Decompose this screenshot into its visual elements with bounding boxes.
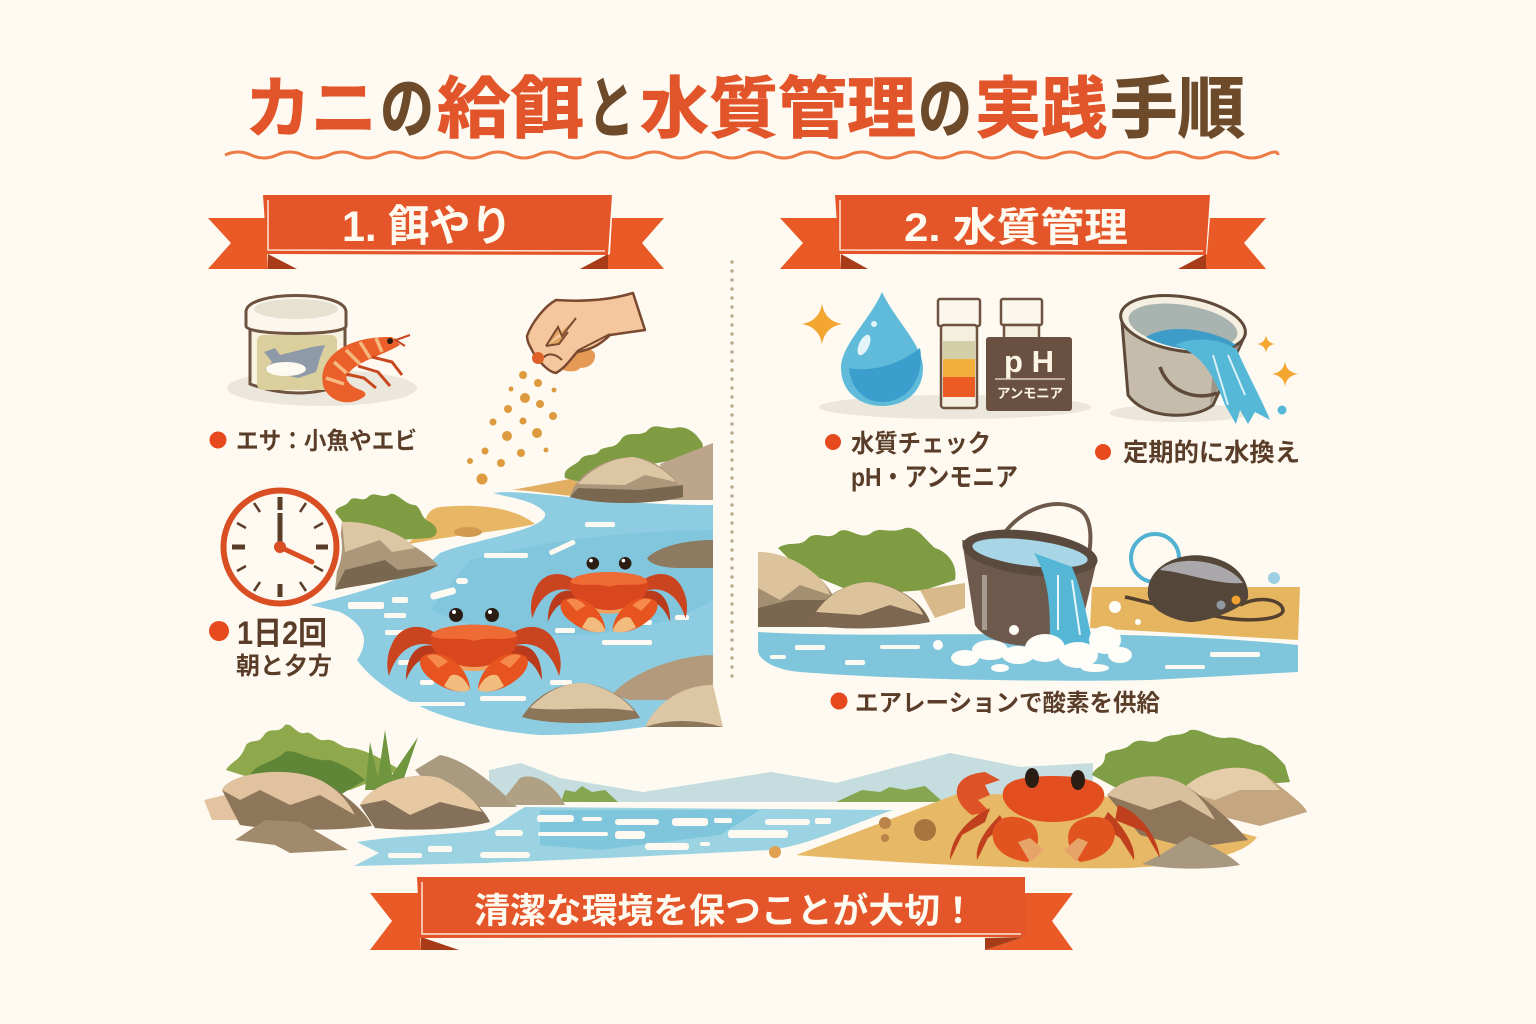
bush — [778, 528, 956, 595]
title: と — [588, 72, 634, 147]
icon: air pump — [1125, 534, 1283, 622]
crab: on sand — [950, 768, 1160, 862]
icon: hand sprinkling feed — [467, 293, 645, 484]
bush: near clock — [335, 494, 437, 540]
icon: shrimp — [322, 335, 410, 402]
heading: 水質管理: 2. 水質管理 — [904, 206, 1128, 250]
label: water check: pH・アンモニア — [851, 462, 1018, 492]
rocks: left — [204, 755, 565, 853]
rock: in water — [647, 540, 713, 568]
label: feeding frequency — [209, 615, 332, 680]
title: の — [918, 72, 972, 147]
title: の — [380, 72, 434, 147]
bush: top right — [565, 426, 703, 482]
scene: aeration — [758, 504, 1300, 681]
sand — [1090, 587, 1300, 640]
icon: pH kit — [986, 299, 1072, 411]
rocks — [758, 552, 965, 628]
banner: 2. water quality — [780, 195, 1266, 269]
label: feed: エサ：小魚やエビ — [236, 428, 417, 455]
icon: water quality test — [802, 292, 1091, 419]
icon: water drop — [841, 292, 923, 406]
bush: right — [1092, 730, 1290, 790]
label: aeration: エアレーションで酸素を供給 — [855, 690, 1160, 717]
text: keep the environment clean: 清潔な環境を保つことが大切！ — [474, 892, 976, 931]
sand — [405, 506, 535, 545]
title: 手順 — [1110, 72, 1245, 147]
icon: clock — [218, 485, 342, 609]
river — [758, 632, 1298, 681]
title — [245, 72, 1245, 147]
icon: bucket pouring water — [1110, 287, 1298, 424]
icon: sparkles — [1257, 335, 1298, 387]
label: water change: 定期的に水換え — [1123, 439, 1300, 467]
banner: 1. feeding — [208, 195, 664, 269]
bush: left — [226, 725, 418, 795]
sand — [796, 794, 1257, 868]
mountains — [489, 753, 1093, 802]
river — [354, 807, 893, 866]
icon: food jar and shrimp — [227, 296, 417, 406]
foam — [933, 625, 1132, 672]
label: water check: 水質チェック — [851, 430, 991, 458]
label: water check — [825, 430, 1018, 492]
title: 水質管理 — [640, 72, 916, 147]
label: feeding frequency: 朝と夕方 — [236, 653, 332, 680]
icon: test tube — [938, 299, 980, 408]
banner: bottom message — [370, 877, 1073, 950]
title: カニ — [245, 72, 377, 147]
heading: 餌やり: 1. 餌やり — [342, 203, 512, 251]
title: 実践 — [975, 72, 1107, 147]
crab: large — [387, 608, 561, 692]
title: 給餌 — [437, 72, 584, 147]
icon: bucket — [960, 504, 1100, 650]
icon: sparkle — [802, 304, 842, 344]
icon: pH kit: アンモニア — [997, 386, 1063, 401]
rock: top right — [570, 443, 713, 503]
label: feeding frequency: 1日2回 — [237, 615, 327, 651]
icon: pH kit: pH — [1004, 344, 1054, 379]
rock: near clock — [335, 522, 438, 590]
scene: bottom landscape — [204, 725, 1307, 869]
crab: small — [531, 557, 687, 632]
rocks: bottom right — [522, 655, 723, 727]
rocks: right — [1107, 768, 1307, 869]
scene: river with crabs — [310, 426, 723, 735]
bushes: far — [561, 786, 943, 802]
